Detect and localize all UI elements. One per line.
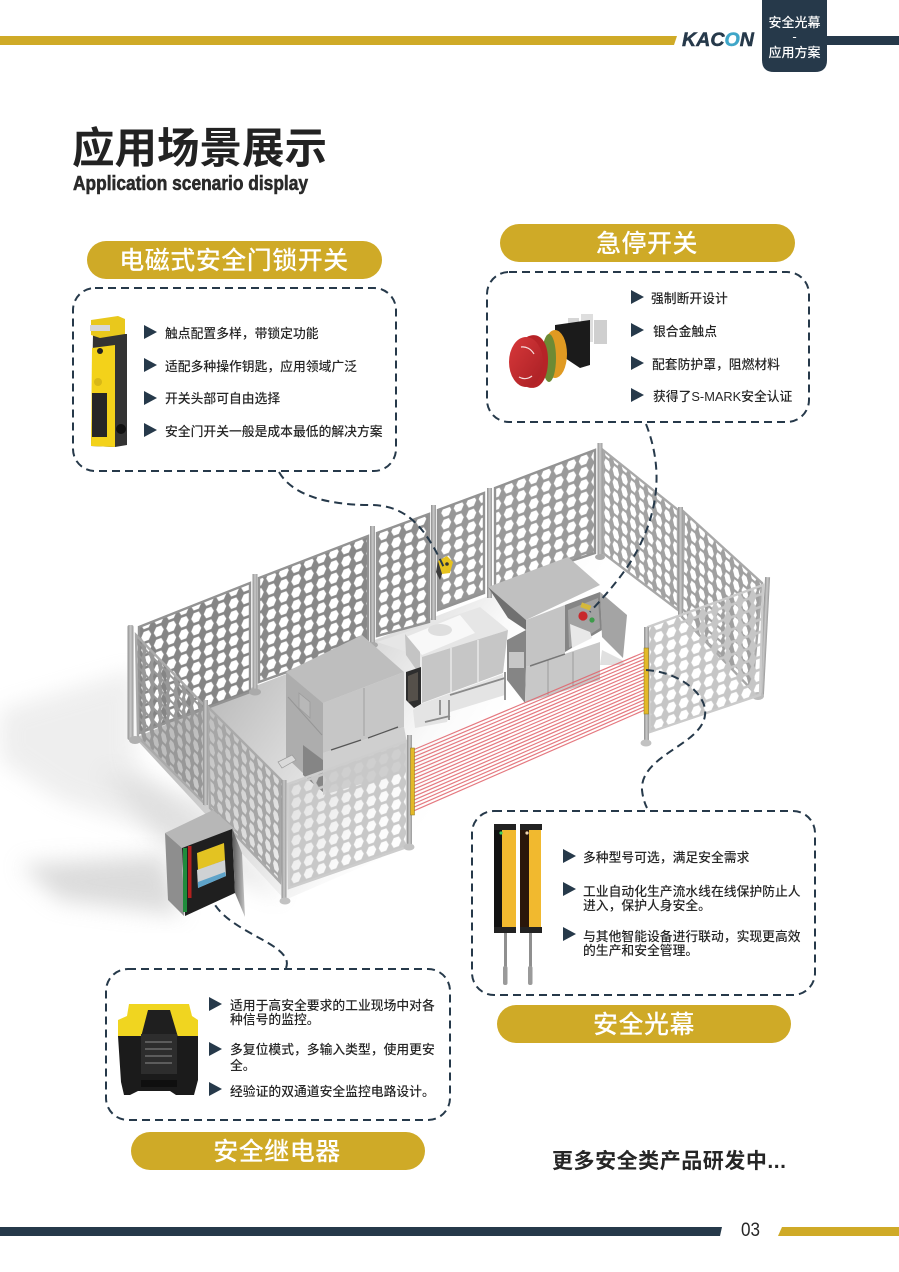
bullet list: door lock: 开关头部可自由选择 xyxy=(165,391,280,406)
bullet list: emergency stop xyxy=(631,290,793,404)
section tab xyxy=(762,0,827,72)
section tab: 安全光幕 xyxy=(768,15,821,30)
bullet list: emergency stop: 获得了S-MARK安全认证 xyxy=(653,389,793,404)
light curtain emitters xyxy=(410,648,648,815)
icon: emergency stop button product xyxy=(509,314,607,388)
footer bar and page number xyxy=(0,1220,899,1241)
icon: safety relay product xyxy=(118,1004,198,1095)
pill heading: door lock xyxy=(87,241,382,279)
bullet list: safety relay: 经验证的双通道安全监控电路设计。 xyxy=(230,1084,435,1099)
bullet list: emergency stop: 强制断开设计 xyxy=(651,291,728,306)
bullet list: light curtain: 进入，保护人身安全。 xyxy=(583,898,711,913)
pill heading: light curtain: 安全光幕 xyxy=(593,1011,695,1039)
title: Application scenario display xyxy=(73,173,309,195)
machine: left cabinet xyxy=(278,635,410,795)
machine: conveyor body xyxy=(377,607,526,728)
bullet list: safety relay: 全。 xyxy=(230,1058,256,1073)
control box xyxy=(165,810,245,917)
bullet list: emergency stop: 银合金触点 xyxy=(653,324,717,339)
section tab: 应用方案 xyxy=(768,45,821,60)
bullet list: light curtain: 与其他智能设备进行联动，实现更高效 xyxy=(583,929,801,944)
footer bar and page number: 03 xyxy=(741,1220,760,1241)
scene: fenced machine cell xyxy=(0,443,770,917)
panel: emergency stop xyxy=(487,224,809,422)
leader: safety relay xyxy=(215,905,287,968)
footer note: 更多安全类产品研发中... xyxy=(552,1149,786,1173)
bullet list: light curtain: 工业自动化生产流水线在线保护防止人 xyxy=(583,884,801,899)
bullet list: door lock: 适配多种操作钥匙，应用领域广泛 xyxy=(165,359,357,374)
bullet list: door lock xyxy=(144,325,383,439)
bullet list: light curtain: 多种型号可选，满足安全需求 xyxy=(583,850,750,865)
bullet list: door lock: 安全门开关一般是成本最低的解决方案 xyxy=(165,424,383,439)
pill heading: emergency stop xyxy=(500,224,795,262)
leader: emergency stop xyxy=(590,424,657,612)
drain pipe xyxy=(278,755,296,768)
section tab: - xyxy=(792,29,797,44)
bullet list: light curtain xyxy=(563,849,801,958)
panel: door lock switch xyxy=(73,241,396,471)
back fence panels xyxy=(139,450,595,733)
right fence panels xyxy=(603,450,762,690)
light curtain beams xyxy=(413,652,645,811)
panel: light curtain xyxy=(472,811,815,1043)
leader: light curtain xyxy=(642,670,705,808)
bullet list: safety relay xyxy=(209,997,435,1099)
left fence panels xyxy=(128,625,283,882)
bullet list: door lock: 触点配置多样，带锁定功能 xyxy=(165,326,319,341)
gate panel right xyxy=(640,585,763,746)
bullet list: safety relay: 多复位模式，多输入类型，使用更安 xyxy=(230,1042,435,1057)
logo: KACON: KACON xyxy=(682,29,755,51)
floor and shadows xyxy=(0,553,765,915)
safety door lock on fence xyxy=(436,556,453,580)
bullet list: light curtain: 的生产和安全管理。 xyxy=(583,943,698,958)
title: 应用场景展示 xyxy=(72,126,327,173)
front fence panel xyxy=(280,735,414,904)
panel: safety relay xyxy=(106,969,450,1170)
bullet list: emergency stop: 配套防护罩，阻燃材料 xyxy=(652,357,780,372)
icon: light curtain product xyxy=(494,824,542,985)
pill heading: emergency stop: 急停开关 xyxy=(596,230,698,258)
back posts xyxy=(249,443,770,700)
pill heading: safety relay: 安全继电器 xyxy=(213,1138,341,1166)
bullet list: safety relay: 种信号的监控。 xyxy=(230,1012,320,1027)
icon: emergency stop on cabinet xyxy=(578,602,595,623)
header bar xyxy=(0,0,899,72)
bullet list: safety relay: 适用于高安全要求的工业现场中对各 xyxy=(230,998,435,1013)
machine: right cabinet xyxy=(488,557,627,703)
pill heading: door lock: 电磁式安全门锁开关 xyxy=(119,247,349,275)
icon: door lock switch product xyxy=(90,316,127,447)
title xyxy=(72,126,327,195)
pill heading: safety relay xyxy=(131,1132,425,1170)
pill heading: light curtain xyxy=(497,1005,791,1043)
leader: door lock xyxy=(279,472,445,570)
